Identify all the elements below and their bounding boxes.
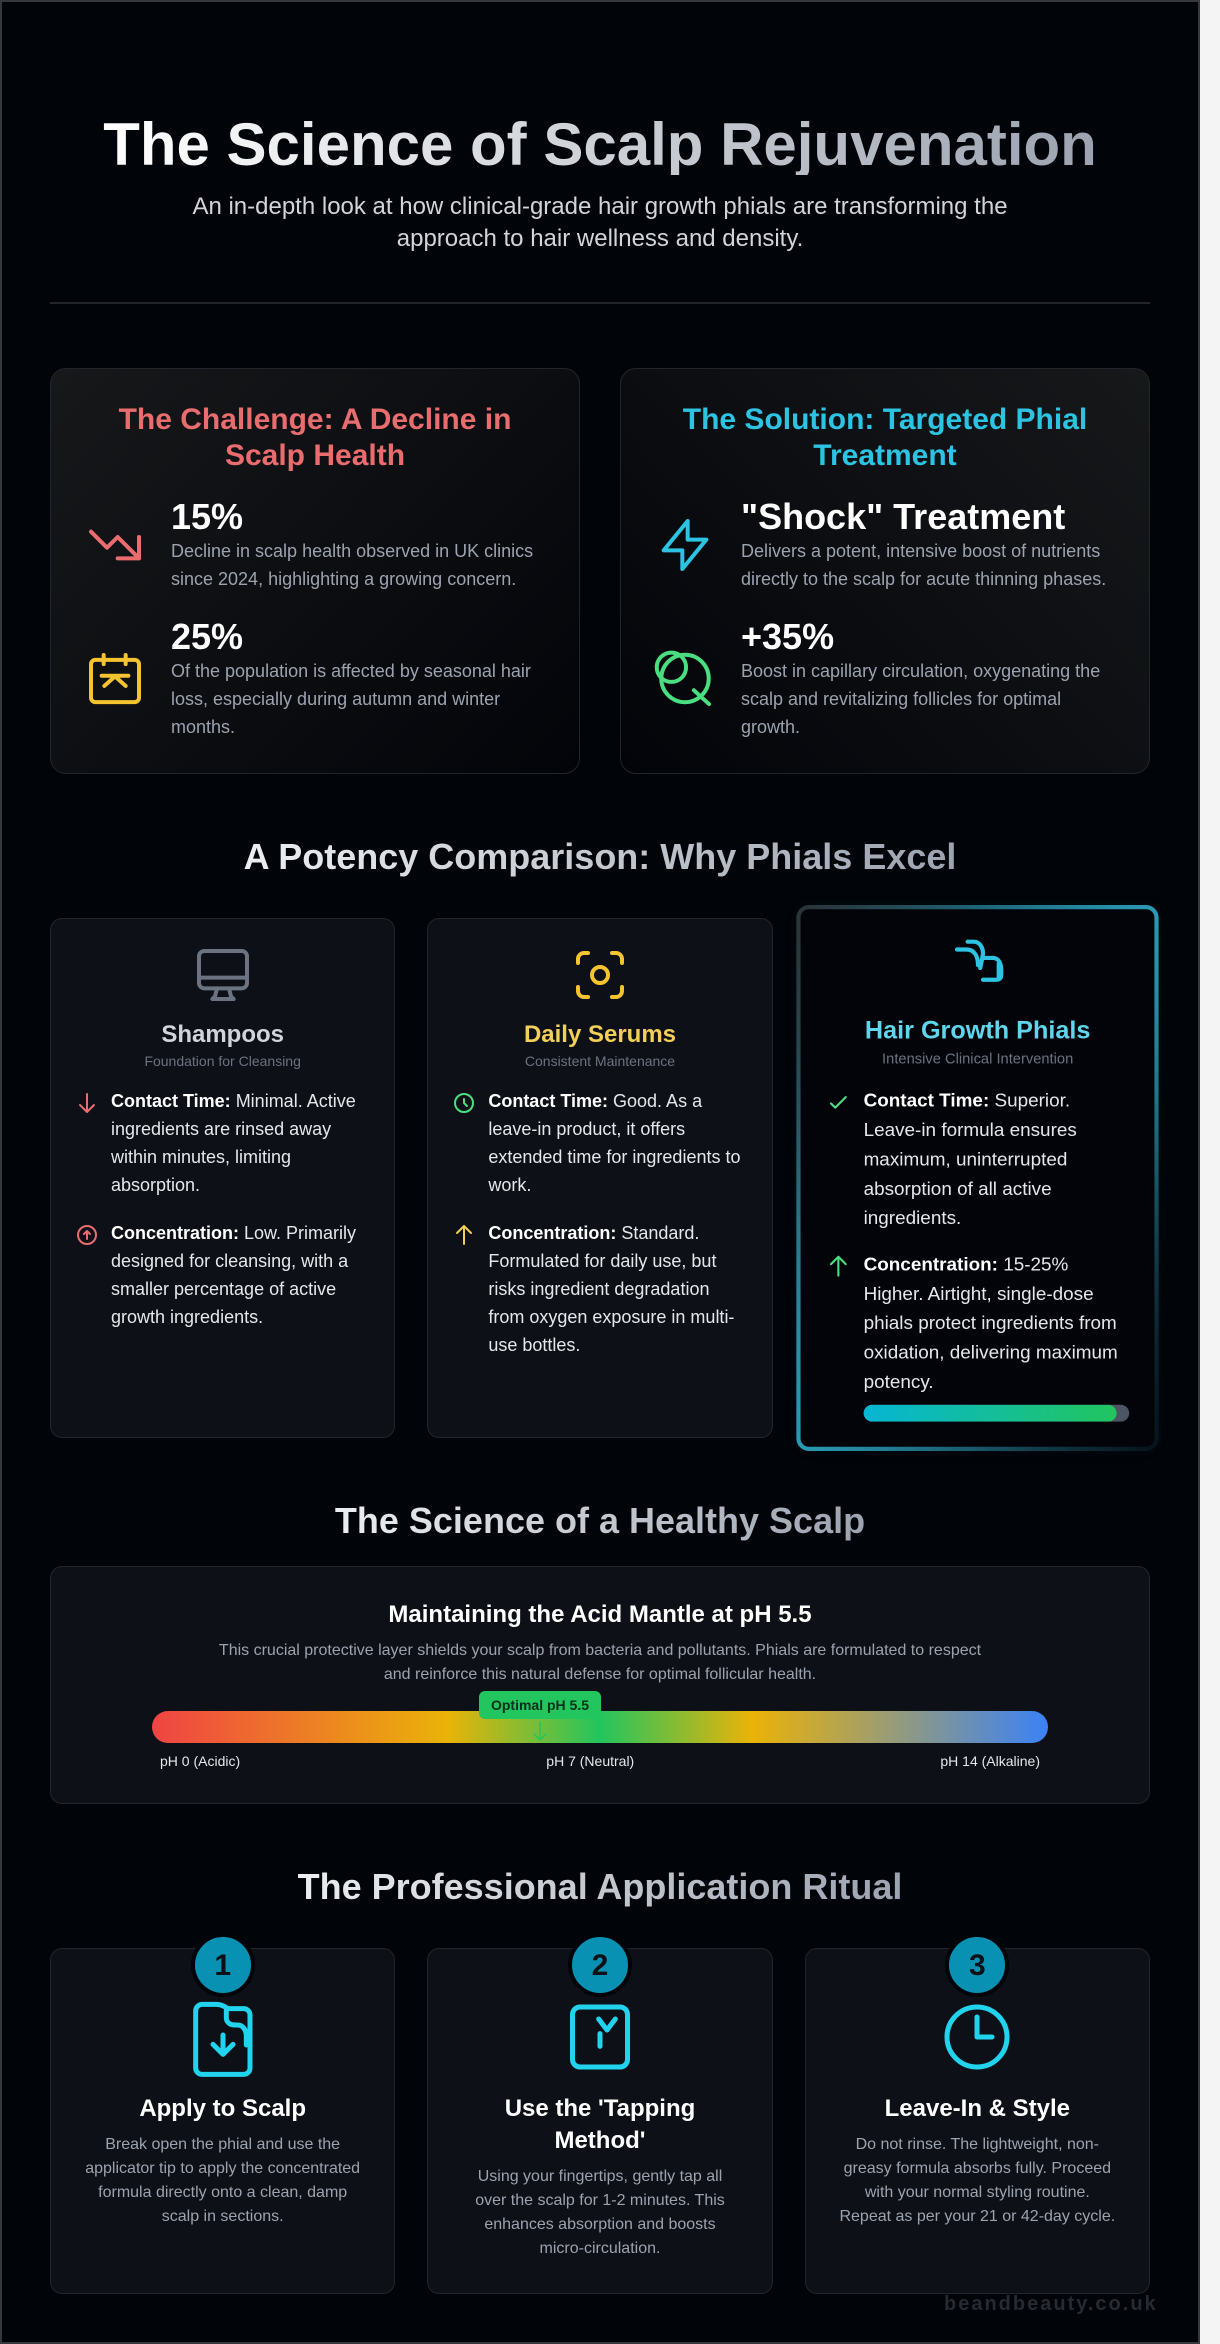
icon: monitor bbox=[197, 949, 249, 1001]
subheading: Consistent Maintenance bbox=[525, 1053, 675, 1069]
stat: 15%: Decline in scalp health observed in UK clinics since 2024, highlighting a growing concern. bbox=[171, 541, 533, 589]
stat: 15% bbox=[88, 496, 533, 589]
pH scale labels: pH 0 (Acidic) bbox=[160, 1753, 240, 1769]
icon: arrow down bbox=[79, 1093, 95, 1113]
heading: healthy scalp: The Science of a Healthy Scalp bbox=[335, 1500, 865, 1541]
subheading: Foundation for Cleansing bbox=[144, 1053, 301, 1069]
icon: calendar bbox=[89, 653, 141, 704]
pH scale labels: pH 14 (Alkaline) bbox=[940, 1753, 1040, 1769]
heading: daily serums: Daily Serums bbox=[524, 1021, 676, 1048]
step title: Leave-In & Style bbox=[885, 2095, 1070, 2122]
step text: Break open the phial and use the applicator tip to apply the concentrated formula directly onto a clean, damp scalp in sections. bbox=[85, 2136, 360, 2225]
step number bbox=[191, 1933, 255, 1997]
panel: step 3 bbox=[805, 1948, 1150, 2294]
icon: trending down bbox=[88, 530, 142, 560]
icon: clock bbox=[454, 1093, 474, 1113]
subheading: Intensive Clinical Intervention bbox=[882, 1050, 1073, 1067]
title: The Science of Scalp Rejuvenation bbox=[103, 111, 1097, 178]
pH scale labels: pH 7 (Neutral) bbox=[546, 1753, 634, 1769]
stat: 15%: 15% bbox=[171, 496, 243, 537]
item: contact time: Contact Time: Superior. Leave-in formula ensures maximum, uninterrupted absorption of all active ingredients. bbox=[863, 1090, 1076, 1228]
heading: challenge: The Challenge: A Decline in Scalp Health bbox=[119, 403, 511, 472]
panel: daily serums bbox=[427, 918, 773, 1438]
stat: +35%: +35% bbox=[741, 616, 834, 657]
step title: Use the 'Tapping Method' bbox=[505, 2095, 695, 2154]
icon: clock bbox=[944, 2004, 1010, 2070]
panel: the solution bbox=[620, 368, 1150, 774]
icon: arrow up bbox=[456, 1225, 472, 1245]
heading: solution: The Solution: Targeted Phial Treatment bbox=[683, 403, 1087, 472]
stat: shock treatment bbox=[662, 496, 1106, 589]
stat: 25%: Of the population is affected by seasonal hair loss, especially during autumn and winter months. bbox=[171, 661, 531, 737]
item: concentration bbox=[830, 1254, 1130, 1422]
icon: tapping fingers bbox=[954, 940, 1004, 982]
icon: arrow up circle bbox=[77, 1225, 97, 1245]
stat: +35% bbox=[654, 616, 1100, 737]
step number: 3 bbox=[969, 1949, 986, 1982]
heading: acid mantle: Maintaining the Acid Mantle at pH 5.5 bbox=[388, 1601, 812, 1628]
panel: shampoos bbox=[50, 918, 395, 1438]
icon: viewfinder bbox=[576, 951, 624, 999]
marker label: Optimal pH 5.5 bbox=[491, 1697, 589, 1713]
marker label bbox=[479, 1691, 601, 1719]
step number: 1 bbox=[214, 1949, 231, 1982]
item: contact time: Contact Time: Good. As a leave-in product, it offers extended time for ingredients to work. bbox=[488, 1091, 740, 1195]
step title: Apply to Scalp bbox=[139, 2095, 306, 2122]
watermark: beandbeauty.co.uk bbox=[944, 2293, 1158, 2315]
description: This crucial protective layer shields your scalp from bacteria and pollutants. Phials are formulated to respect and reinforce this natural defense for optimal follicular health. bbox=[219, 1642, 981, 1683]
subtitle: An in-depth look at how clinical-grade hair growth phials are transforming the approach to hair wellness and density. bbox=[192, 193, 1008, 252]
icon: check bbox=[830, 1096, 847, 1109]
pH scale labels bbox=[160, 1753, 1040, 1769]
stat: +35%: Boost in capillary circulation, oxygenating the scalp and revitalizing follicles for optimal growth. bbox=[741, 661, 1100, 737]
panel: the challenge bbox=[50, 368, 580, 774]
step number bbox=[945, 1933, 1009, 1997]
icon: tapping device bbox=[570, 2004, 630, 2070]
item: concentration: Concentration: Standard. Formulated for daily use, but risks ingredient degradation from oxygen exposure in multi-use bottles. bbox=[488, 1223, 734, 1355]
stat: shock treatment: "Shock" Treatment bbox=[741, 496, 1065, 537]
stat: shock treatment: Delivers a potent, intensive boost of nutrients directly to the scalp for acute thinning phases. bbox=[741, 541, 1106, 589]
pH gradient bar bbox=[152, 1711, 1048, 1743]
item: concentration: Concentration: Low. Primarily designed for cleansing, with a smaller percentage of active growth ingredients. bbox=[111, 1223, 356, 1327]
item: concentration: Concentration: 15-25% Higher. Airtight, single-dose phials protect ingredients from oxidation, delivering maximum potency. bbox=[863, 1254, 1117, 1392]
panel: pH scale bbox=[50, 1566, 1150, 1804]
icon: arrow up bbox=[830, 1256, 847, 1277]
step text: Using your fingertips, gently tap all over the scalp for 1-2 minutes. This enhances absorption and boosts micro-circulation. bbox=[475, 2168, 725, 2257]
stat: 25%: 25% bbox=[171, 616, 243, 657]
stat: 25% bbox=[89, 616, 531, 737]
marker arrow bbox=[533, 1721, 547, 1741]
panel: step 2 bbox=[427, 1948, 773, 2294]
panel: step 1 bbox=[50, 1948, 395, 2294]
icon: circulation circles bbox=[654, 650, 712, 706]
heading: hair growth phials: Hair Growth Phials bbox=[865, 1016, 1090, 1045]
panel: hair growth phials (featured) bbox=[796, 905, 1159, 1451]
progress bar bbox=[863, 1405, 1129, 1422]
step number bbox=[568, 1933, 632, 1997]
step text: Do not rinse. The lightweight, non-greasy formula absorbs fully. Proceed with your normal styling routine. Repeat as per your 21 or 42-day cycle. bbox=[839, 2136, 1115, 2225]
item: contact time: Contact Time: Minimal. Active ingredients are rinsed away within minutes, limiting absorption. bbox=[111, 1091, 356, 1195]
icon: phial file with down arrow bbox=[193, 2002, 252, 2077]
heading: application ritual: The Professional Application Ritual bbox=[298, 1866, 902, 1907]
step number: 2 bbox=[592, 1949, 608, 1982]
heading: shampoos: Shampoos bbox=[161, 1021, 284, 1048]
icon: bolt bbox=[662, 519, 708, 571]
heading: potency comparison: A Potency Comparison: Why Phials Excel bbox=[244, 836, 956, 877]
